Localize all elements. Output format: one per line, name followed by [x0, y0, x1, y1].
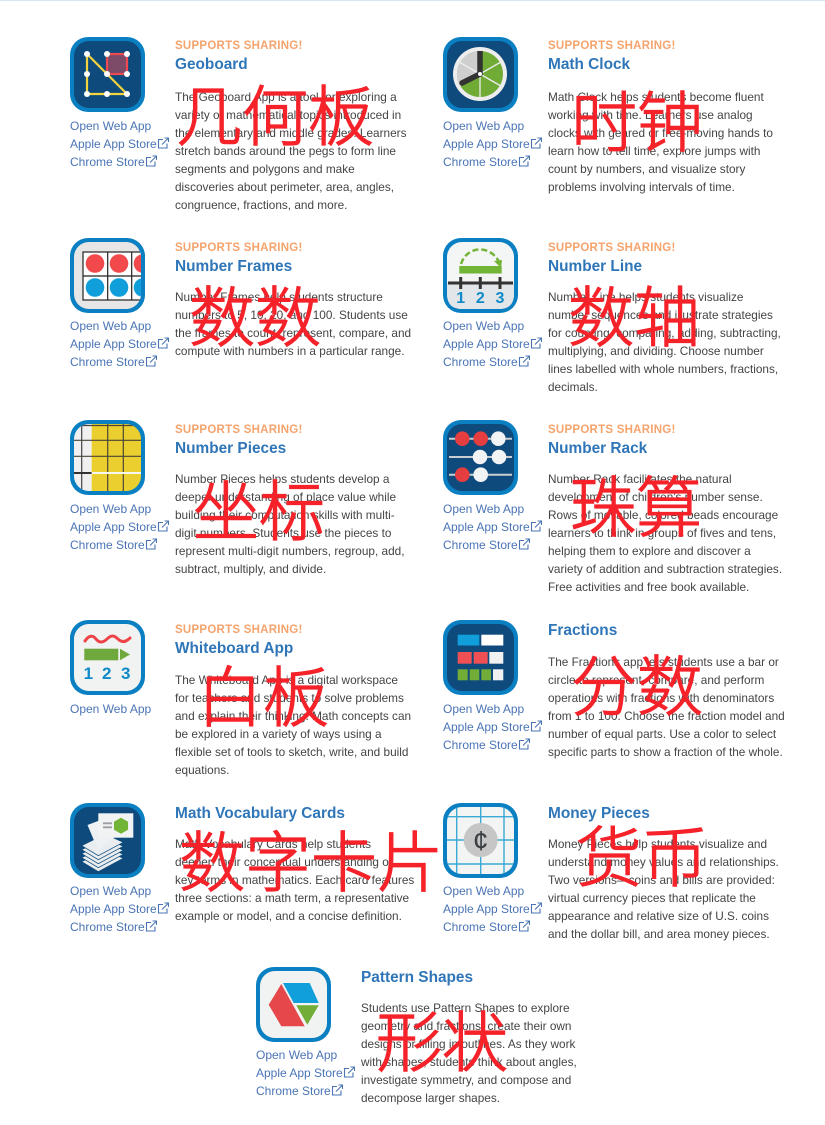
links	[443, 502, 542, 552]
links: Chrome Store	[70, 355, 145, 369]
description: virtual currency pieces that replicate the	[548, 891, 756, 905]
description	[361, 1001, 577, 1105]
links: Chrome Store	[256, 1084, 331, 1098]
links: Apple App Store	[443, 902, 530, 916]
sharing label: SUPPORTS SHARING!	[548, 242, 676, 254]
links: Apple App Store	[443, 137, 530, 151]
links	[70, 502, 169, 552]
description: compute with numbers in a particular range.	[175, 344, 404, 358]
sharing label: SUPPORTS SHARING!	[548, 424, 676, 436]
description: decompose larger shapes.	[361, 1091, 500, 1105]
links: Chrome Store	[70, 920, 145, 934]
description: multiplying, and dividing. Choose number	[548, 344, 764, 358]
sharing label: SUPPORTS SHARING!	[175, 242, 303, 254]
links	[70, 119, 169, 169]
sharing label: SUPPORTS SHARING!	[175, 624, 303, 636]
overlay label: 分数: 分数	[571, 650, 703, 724]
panel: Geoboard	[70, 37, 406, 212]
links: Open Web App	[70, 319, 151, 333]
icon: number pieces	[70, 420, 145, 495]
description: clocks with geared or free-moving hands to	[548, 126, 773, 140]
description	[175, 90, 406, 212]
description: equations.	[175, 763, 229, 777]
description: operations with fractions with denominators	[548, 691, 774, 705]
description: Number Line helps students visualize	[548, 290, 743, 304]
description: appearance and relative size of U.S. coins	[548, 909, 769, 923]
links: Open Web App	[443, 702, 524, 716]
description: discoveries about perimeter, area, angles,	[175, 180, 394, 194]
description	[175, 472, 404, 576]
panel: Whiteboard App	[70, 620, 411, 777]
panel: Money Pieces	[443, 803, 779, 941]
links: Chrome Store	[443, 538, 518, 552]
overlay label: 数轴: 数轴	[568, 281, 700, 355]
description: Number Frames help students structure	[175, 290, 383, 304]
description: numbers to 5, 10, 20, and 100. Students use	[175, 308, 408, 322]
description: helping them to explore and discover a	[548, 544, 751, 558]
panel: Fractions	[443, 620, 785, 759]
description: working with time. Learners use analog	[548, 108, 753, 122]
links	[70, 884, 169, 934]
links: Apple App Store	[256, 1066, 343, 1080]
panel: Number Line	[443, 238, 781, 394]
overlay label: 形状: 形状	[376, 1006, 508, 1080]
description: and the dollar bill, and area money pieces.	[548, 927, 770, 941]
links: Open Web App	[70, 884, 151, 898]
description: decimals.	[548, 380, 598, 394]
links	[70, 319, 169, 369]
heading: Number Rack	[548, 440, 647, 457]
heading: Fractions	[548, 622, 617, 639]
description: problems involving intervals of time.	[548, 180, 735, 194]
description: key terms in mathematics. Each card features	[175, 873, 414, 887]
links	[443, 702, 542, 752]
description	[548, 90, 773, 194]
heading: Math Vocabulary Cards	[175, 805, 345, 822]
panel: Math Vocabulary Cards	[70, 803, 414, 934]
icon: number rack	[443, 420, 518, 495]
icon: whiteboard	[70, 620, 145, 695]
heading: Whiteboard App	[175, 640, 293, 657]
links: Apple App Store	[443, 720, 530, 734]
description: circle to represent, compare, and perform	[548, 673, 764, 687]
icon: fractions	[443, 620, 518, 695]
description: number sequences and illustrate strategies	[548, 308, 773, 322]
description: development of children's number sense.	[548, 490, 763, 504]
description: from 1 to 100. Choose the fraction model and	[548, 709, 785, 723]
links: Chrome Store	[443, 738, 518, 752]
icon: whiteboard: 1	[84, 664, 93, 683]
overlay label: 数字卡片: 数字卡片	[179, 826, 443, 900]
icon: number line: 3	[496, 290, 505, 307]
description: digit numbers. Students use the pieces to	[175, 526, 391, 540]
description: segments and polygons and make	[175, 162, 355, 176]
description: deeper understanding of place value while	[175, 490, 396, 504]
description: specific parts to show a fraction of the whole.	[548, 745, 783, 759]
description: Math Clock helps students become fluent	[548, 90, 764, 104]
icon: whiteboard: 3	[121, 664, 130, 683]
icon: math clock	[443, 37, 518, 112]
links: Chrome Store	[443, 920, 518, 934]
description: number of equal parts. Use a color to select	[548, 727, 776, 741]
heading: Number Frames	[175, 258, 292, 275]
description: and explain their thinking. Math concepts can	[175, 709, 411, 723]
description: learn how to tell time, explore jumps with	[548, 144, 760, 158]
panel: Pattern Shapes	[256, 967, 577, 1105]
sharing label: SUPPORTS SHARING!	[548, 40, 676, 52]
heading: Number Pieces	[175, 440, 286, 457]
description: The Fractions app lets students use a bar or	[548, 655, 779, 669]
sharing label: SUPPORTS SHARING!	[175, 40, 303, 52]
description: for teachers and students to solve problems	[175, 691, 404, 705]
links: Open Web App	[443, 884, 524, 898]
heading: Money Pieces	[548, 805, 650, 822]
description: deepen their conceptual understanding of	[175, 855, 392, 869]
links: Apple App Store	[70, 520, 157, 534]
links: Apple App Store	[443, 520, 530, 534]
links: Open Web App	[443, 319, 524, 333]
links	[443, 119, 542, 169]
description	[175, 837, 414, 923]
overlay label: 几何板: 几何板	[176, 80, 374, 154]
description: learners to think in groups of fives and tens,	[548, 526, 776, 540]
description: the frames to count, represent, compare, and	[175, 326, 411, 340]
description: Math Vocabulary Cards help students	[175, 837, 371, 851]
links: Apple App Store	[443, 337, 530, 351]
overlay label: 白板: 白板	[197, 661, 329, 735]
description: Students use Pattern Shapes to explore	[361, 1001, 570, 1015]
description	[548, 290, 781, 394]
links: Open Web App	[70, 119, 151, 133]
links: Chrome Store	[443, 155, 518, 169]
description: building their computation skills with multi-	[175, 508, 395, 522]
links: Apple App Store	[70, 137, 157, 151]
heading: Pattern Shapes	[361, 969, 473, 986]
description	[175, 290, 411, 358]
description: example or model, and a concise definition.	[175, 909, 402, 923]
description: three sections: a math term, a representative	[175, 891, 409, 905]
links: Chrome Store	[70, 538, 145, 552]
icon: pattern shapes	[256, 967, 331, 1042]
links: Open Web App	[70, 502, 151, 516]
icon: vocabulary cards	[70, 803, 145, 878]
icon: number line: 2	[476, 290, 485, 307]
description: the elementary and middle grades. Learners	[175, 126, 406, 140]
icon: number line: 1	[456, 290, 465, 307]
links: Open Web App	[70, 702, 151, 716]
panel: Number Pieces	[70, 420, 404, 576]
description: geometry and fractions, create their own	[361, 1019, 571, 1033]
links: Chrome Store	[443, 355, 518, 369]
icon: number frames	[70, 238, 145, 313]
description: subtract, multiply, and divide.	[175, 562, 326, 576]
links: Open Web App	[443, 119, 524, 133]
heading: Number Line	[548, 258, 642, 275]
description	[548, 472, 782, 594]
links: Open Web App	[256, 1048, 337, 1062]
links: Chrome Store	[70, 155, 145, 169]
description: Free activities and free book available.	[548, 580, 749, 594]
description: Two versions—coins and bills are provided:	[548, 873, 775, 887]
overlay label: 货币: 货币	[576, 821, 708, 895]
description: be explored in a variety of ways using a	[175, 727, 382, 741]
description	[175, 673, 411, 777]
description: represent multi-digit numbers, regroup, add,	[175, 544, 404, 558]
links: Open Web App	[443, 502, 524, 516]
description: investigate symmetry, and compose and	[361, 1073, 571, 1087]
description	[548, 655, 785, 759]
description: lines labelled with whole numbers, fractions,	[548, 362, 778, 376]
description: Money Pieces help students visualize and	[548, 837, 767, 851]
description: variety of addition and subtraction strategies.	[548, 562, 782, 576]
description: for counting, comparing, adding, subtracting,	[548, 326, 781, 340]
description: stretch bands around the pegs to form line	[175, 144, 396, 158]
icon: geoboard	[70, 37, 145, 112]
description: Rows of movable, colored beads encourage	[548, 508, 778, 522]
description: flexible set of tools to sketch, write, and build	[175, 745, 408, 759]
panel: Number Rack	[443, 420, 782, 594]
links	[443, 884, 542, 934]
description: with shapes, students think about angles,	[361, 1055, 577, 1069]
links	[443, 319, 542, 369]
description	[548, 837, 779, 941]
overlay label: 数数: 数数	[189, 281, 321, 355]
description: count by numbers, and visualize story	[548, 162, 745, 176]
heading: Math Clock	[548, 56, 630, 73]
description: designs or filling in outlines. As they work	[361, 1037, 575, 1051]
heading: Geoboard	[175, 56, 248, 73]
links	[256, 1048, 355, 1098]
overlay label: 时钟: 时钟	[571, 86, 703, 160]
icon: money pieces: ¢	[473, 825, 488, 856]
description: variety of mathematical topics introduced in	[175, 108, 401, 122]
links: Apple App Store	[70, 902, 157, 916]
description: The Whiteboard App is a digital workspace	[175, 673, 398, 687]
sharing label: SUPPORTS SHARING!	[175, 424, 303, 436]
description: understand money values and relationships.	[548, 855, 779, 869]
overlay label: 坐标: 坐标	[193, 475, 325, 549]
description: congruence, fractions, and more.	[175, 198, 347, 212]
panel: Number Frames	[70, 238, 411, 369]
links: Apple App Store	[70, 337, 157, 351]
icon: whiteboard: 2	[102, 664, 111, 683]
description: Number Rack facilitates the natural	[548, 472, 732, 486]
icon: money pieces	[443, 803, 518, 878]
overlay label: 珠算: 珠算	[570, 471, 702, 545]
panel: Math Clock	[443, 37, 773, 194]
description: The Geoboard App is a tool for exploring a	[175, 90, 397, 104]
icon: number line	[443, 238, 518, 313]
description: Number Pieces helps students develop a	[175, 472, 389, 486]
